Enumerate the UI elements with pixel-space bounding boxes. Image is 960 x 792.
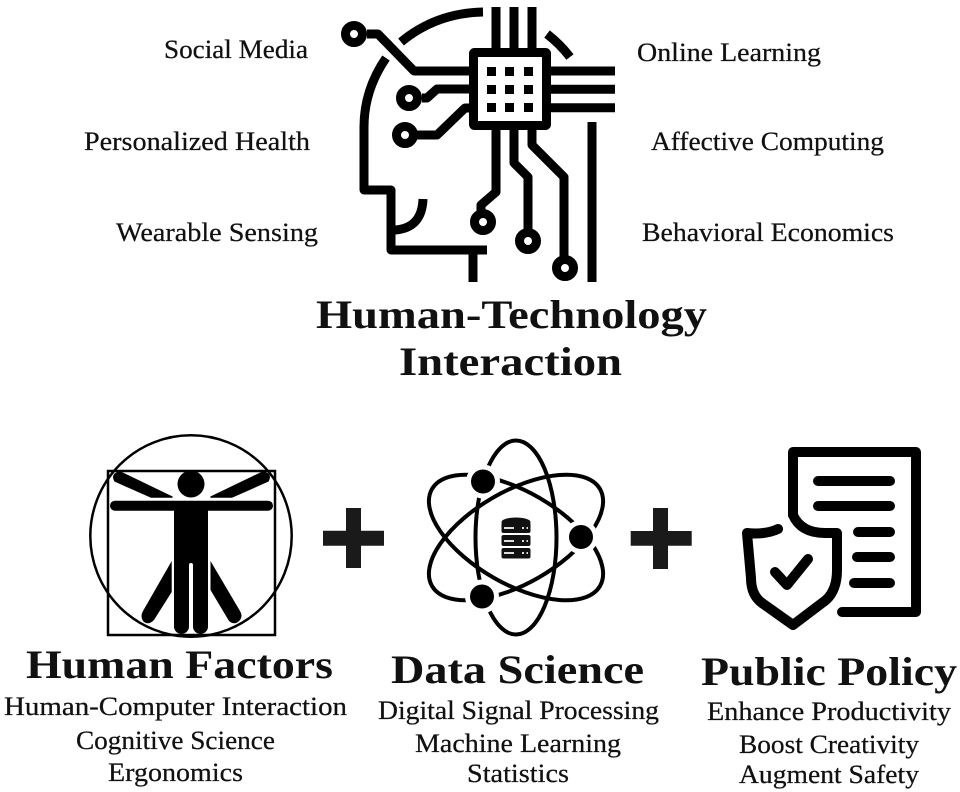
label: Affective Computing: Affective Computing <box>651 127 884 156</box>
text: Data Science topics <box>378 696 659 788</box>
icon: head with circuit chip <box>346 7 615 282</box>
text: Data Science topics: Machine Learning <box>415 729 621 758</box>
text: Public Policy topics: Boost Creativity <box>739 730 919 759</box>
icon: atom with database <box>409 440 623 634</box>
label: Wearable Sensing: Wearable Sensing <box>116 218 318 247</box>
text: Human Factors topics: Human-Computer Interaction <box>4 692 347 721</box>
heading: Data Science: Data Science <box>391 647 644 692</box>
title: Human-Technology Interaction: Interaction <box>399 339 622 384</box>
label: Behavioral Economics: Behavioral Economics <box>642 218 894 247</box>
text: Public Policy topics: Augment Safety <box>739 760 919 789</box>
label: Online Learning: Online Learning <box>637 38 821 67</box>
title: Human-Technology Interaction <box>316 292 707 384</box>
text: Data Science topics: Digital Signal Processing <box>378 696 659 725</box>
heading: Public Policy: Public Policy <box>701 649 957 694</box>
title: Human-Technology Interaction: Human-Technology <box>316 292 707 337</box>
icon: database stack <box>502 518 530 558</box>
text: Public Policy topics: Enhance Productivity <box>707 697 951 726</box>
text: Human Factors topics <box>4 692 347 787</box>
icon: plus <box>631 508 692 569</box>
label: Social Media: Social Media <box>164 35 308 64</box>
icon: plus <box>323 508 384 568</box>
icon: Vitruvian man <box>90 435 292 637</box>
text: Public Policy topics <box>707 697 951 789</box>
label: Personalized Health: Personalized Health <box>84 127 310 156</box>
icon: policy document and shield <box>747 452 916 625</box>
heading: Human Factors: Human Factors <box>26 642 333 687</box>
text: Data Science topics: Statistics <box>467 759 569 788</box>
text: Human Factors topics: Cognitive Science <box>76 726 275 755</box>
text: Human Factors topics: Ergonomics <box>108 758 243 787</box>
